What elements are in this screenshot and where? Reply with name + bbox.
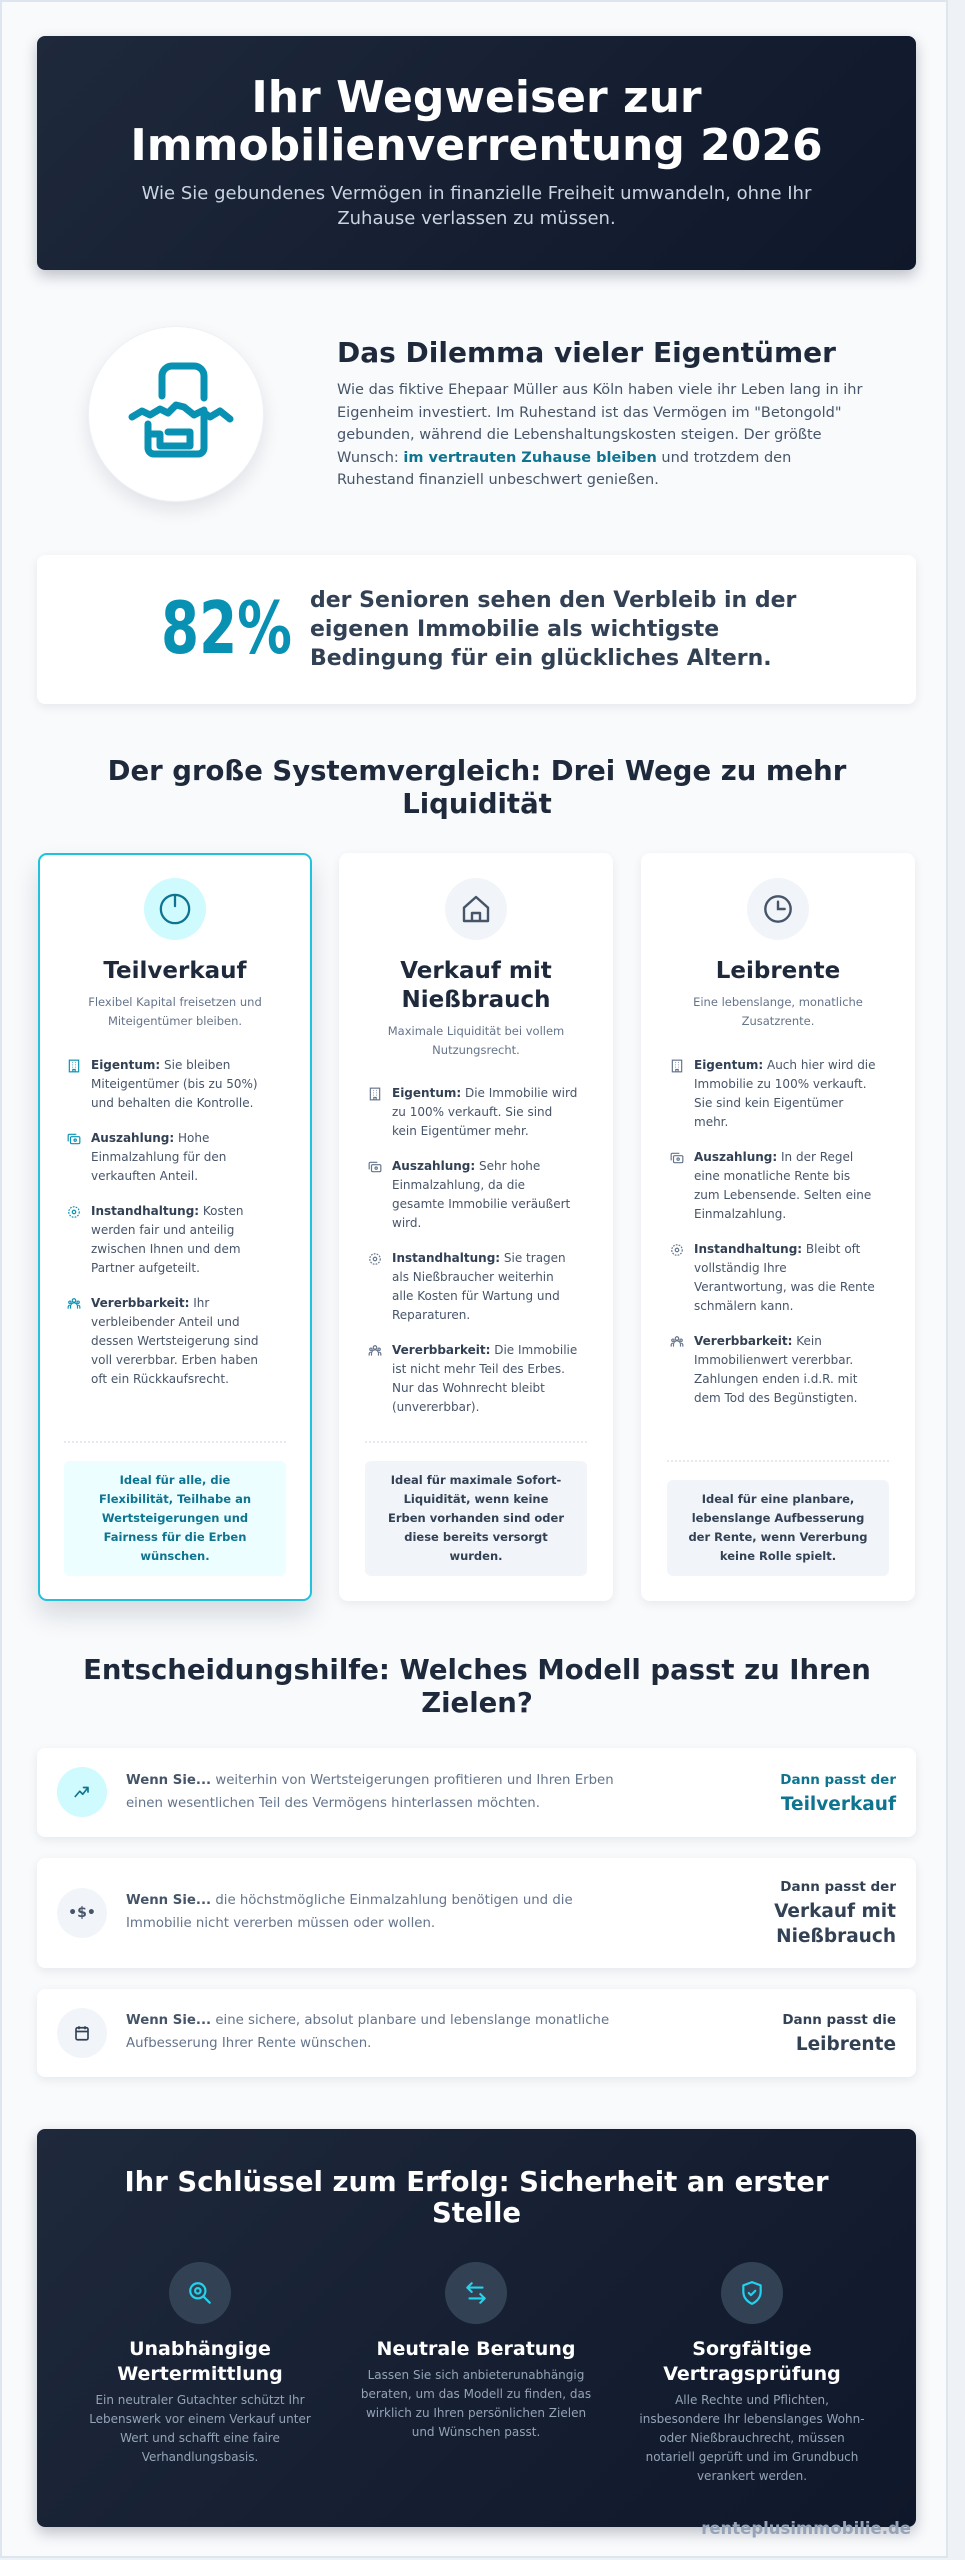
recommendation <box>774 1879 896 1947</box>
decision row: Nießbrauch <box>37 1858 916 1968</box>
recommendation box: der Rente, wenn Vererbung <box>688 1530 868 1544</box>
paragraph: Wie das fiktive Ehepaar Müller aus Köln haben viele ihr Leben lang in ihr <box>337 382 862 398</box>
big number: 82% <box>161 586 292 670</box>
item: valuation: Verhandlungsbasis. <box>142 2450 258 2464</box>
item: contract check: Alle Rechte und Pflichten, <box>675 2393 829 2407</box>
subtitle: Wie Sie gebundenes Vermögen in finanzielle Freiheit umwandeln, ohne Ihr <box>142 183 811 204</box>
icon: money: •$• <box>68 1905 96 1921</box>
item: contract check <box>639 2262 865 2483</box>
item: valuation: Wert und schafft eine faire <box>120 2431 280 2445</box>
panel: key to success <box>37 2129 916 2527</box>
title: Ihr Wegweiser zur <box>251 72 702 123</box>
recommendation box: Ideal für alle, die <box>120 1473 230 1487</box>
heading: system comparison: Der große Systemvergleich: Drei Wege zu mehr Liquidität <box>108 755 846 820</box>
item: advice: beraten, um das Modell zu finden, das <box>361 2387 591 2401</box>
card title: Nießbrauch <box>402 987 550 1013</box>
condition text: Wenn Sie... eine sichere, absolut planbare und lebenslange monatliche <box>126 2013 609 2028</box>
subtitle <box>142 183 812 229</box>
feature list: Einmalzahlung, da die <box>392 1178 525 1192</box>
feature list: oft ein Rückkaufsrecht. <box>91 1372 229 1386</box>
feature list: eine monatliche Rente bis <box>694 1169 850 1183</box>
recommendation box: Flexibilität, Teilhabe an <box>99 1492 251 1506</box>
card subtitle: Nutzungsrecht. <box>432 1043 520 1057</box>
recommendation: Verkauf mit <box>774 1901 896 1922</box>
recommendation box: wurden. <box>449 1549 503 1563</box>
recommendation box <box>365 1441 587 1576</box>
title <box>130 72 823 171</box>
feature list: Reparaturen. <box>392 1308 470 1322</box>
panel: Verkauf mit Nießbrauch <box>339 853 613 1601</box>
item: valuation: Ein neutraler Gutachter schützt Ihr <box>95 2393 305 2407</box>
item: valuation: Unabhängige <box>129 2338 271 2360</box>
recommendation <box>780 1772 896 1815</box>
feature list: zu 100% verkauft. Sie sind <box>392 1105 552 1119</box>
item: contract check: notariell geprüft und im Grundbuch <box>646 2450 858 2464</box>
feature list: voll vererbbar. Erben haben <box>91 1353 258 1367</box>
recommendation box: Fairness für die Erben <box>104 1530 246 1544</box>
recommendation <box>782 2012 896 2055</box>
condition text <box>126 2013 609 2050</box>
stat text: der Senioren sehen den Verbleib in der <box>310 588 796 613</box>
watermark: renteplusimmobilie.de <box>701 2519 911 2538</box>
icon: house <box>445 878 507 940</box>
heading: Ihr Schlüssel zum Erfolg: Sicherheit an erster Stelle <box>124 2166 829 2229</box>
feature list: zwischen Ihnen und dem <box>91 1242 241 1256</box>
feature list: dem Tod des Begünstigten. <box>694 1391 858 1405</box>
paragraph: gebunden, während die Lebenshaltungskosten steigen. Der größte <box>337 427 822 443</box>
recommendation box: keine Rolle spielt. <box>720 1549 836 1563</box>
title: Immobilienverrentung 2026 <box>130 120 823 171</box>
feature list: werden fair und anteilig <box>91 1223 234 1237</box>
icon: arrows <box>445 2262 507 2324</box>
recommendation box: lebenslange Aufbesserung <box>692 1511 864 1525</box>
feature list: Nur das Wohnrecht bleibt <box>392 1381 545 1395</box>
feature list: und behalten die Kontrolle. <box>91 1096 253 1110</box>
feature list: zum Lebensende. Selten eine <box>694 1188 871 1202</box>
feature list: Eigentum: Sie bleiben <box>91 1058 230 1072</box>
feature list <box>670 1058 876 1405</box>
card title: Verkauf mit <box>400 958 552 984</box>
recommendation: Teilverkauf <box>781 1794 896 1815</box>
recommendation box <box>64 1441 286 1576</box>
card title <box>400 958 552 1013</box>
icon: trend up <box>57 1767 107 1817</box>
item: contract check: verankert werden. <box>697 2469 807 2483</box>
feature list: verkauften Anteil. <box>91 1169 198 1183</box>
recommendation: Leibrente <box>796 2034 896 2055</box>
item: advice: und Wünschen passt. <box>412 2425 540 2439</box>
feature list <box>68 1058 259 1386</box>
item: valuation <box>89 2262 311 2464</box>
feature list: Partner aufgeteilt. <box>91 1261 200 1275</box>
header banner <box>37 36 916 270</box>
subtitle: Zuhause verlassen zu müssen. <box>337 208 616 229</box>
feature list: ist nicht mehr Teil des Erbes. <box>392 1362 565 1376</box>
recommendation: Dann passt die <box>782 2012 896 2028</box>
feature list: Auszahlung: Sehr hohe <box>392 1159 540 1173</box>
recommendation box <box>667 1460 889 1576</box>
card subtitle <box>388 1024 564 1057</box>
feature list: Auszahlung: In der Regel <box>694 1150 853 1164</box>
icon: shield <box>721 2262 783 2324</box>
feature list: Vererbbarkeit: Die Immobilie <box>392 1343 577 1357</box>
feature list: Instandhaltung: Kosten <box>91 1204 243 1218</box>
condition text <box>126 1893 573 1930</box>
feature list: schmälern kann. <box>694 1299 793 1313</box>
card subtitle: Eine lebenslange, monatliche <box>693 995 863 1009</box>
feature list: Instandhaltung: Sie tragen <box>392 1251 566 1265</box>
stat text: Bedingung für ein glückliches Altern. <box>310 646 772 671</box>
card subtitle <box>693 995 863 1028</box>
recommendation box: diese bereits versorgt <box>404 1530 548 1544</box>
feature list: kein Eigentümer mehr. <box>392 1124 529 1138</box>
feature list: alle Kosten für Wartung und <box>392 1289 560 1303</box>
feature list: als Nießbraucher weiterhin <box>392 1270 554 1284</box>
feature list: mehr. <box>694 1115 728 1129</box>
paragraph <box>337 382 862 488</box>
feature list: verbleibender Anteil und <box>91 1315 240 1329</box>
feature list: Vererbbarkeit: Ihr <box>91 1296 209 1310</box>
icon: calendar <box>57 2008 107 2058</box>
item: contract check: insbesondere Ihr lebenslanges Wohn- <box>639 2412 865 2426</box>
paragraph: Ruhestand finanziell unbeschwert genießen. <box>337 472 659 488</box>
item: contract check: oder Nießbrauchrecht, müssen <box>659 2431 845 2445</box>
card subtitle: Miteigentümer bleiben. <box>108 1014 242 1028</box>
recommendation: Nießbrauch <box>776 1926 896 1947</box>
icon: house lock in circle <box>88 326 264 502</box>
feature list: (unvererbbar). <box>392 1400 479 1414</box>
condition text: Immobilie nicht vererben müssen oder wollen. <box>126 1916 435 1930</box>
feature list: Vererbbarkeit: Kein <box>694 1334 822 1348</box>
decision row: Leibrente <box>37 1989 916 2077</box>
item: advice <box>361 2262 591 2439</box>
feature list: Sie sind kein Eigentümer <box>694 1096 843 1110</box>
feature list: gesamte Immobilie veräußert <box>392 1197 570 1211</box>
card subtitle: Maximale Liquidität bei vollem <box>388 1024 564 1038</box>
item: valuation: Lebenswerk vor einem Verkauf unter <box>89 2412 311 2426</box>
feature list <box>368 1086 577 1414</box>
stat text <box>310 588 796 671</box>
feature list: Auszahlung: Hohe <box>91 1131 209 1145</box>
recommendation box: wünschen. <box>140 1549 210 1563</box>
decision row: Teilverkauf <box>37 1748 916 1837</box>
condition text: Aufbesserung Ihrer Rente wünschen. <box>126 2036 371 2050</box>
stat text: eigenen Immobilie als wichtigste <box>310 617 719 642</box>
icon: clock <box>747 878 809 940</box>
condition text: Wenn Sie... weiterhin von Wertsteigerungen profitieren und Ihren Erben <box>126 1773 614 1788</box>
icon: search <box>169 2262 231 2324</box>
card title: Teilverkauf <box>103 958 247 984</box>
condition text: Wenn Sie... die höchstmögliche Einmalzahlung benötigen und die <box>126 1893 573 1908</box>
item: advice: wirklich zu Ihren persönlichen Zielen <box>366 2406 586 2420</box>
item: valuation: Wertermittlung <box>117 2363 283 2385</box>
feature list: dessen Wertsteigerung sind <box>91 1334 259 1348</box>
feature list: vollständig Ihre <box>694 1261 787 1275</box>
feature list: Zahlungen enden i.d.R. mit <box>694 1372 857 1386</box>
recommendation: Dann passt der <box>780 1879 896 1895</box>
card subtitle: Flexibel Kapital freisetzen und <box>88 995 262 1009</box>
feature list: Immobilie zu 100% verkauft. <box>694 1077 867 1091</box>
item: contract check: Vertragsprüfung <box>663 2363 841 2385</box>
card title: Leibrente <box>716 958 840 984</box>
card subtitle: Zusatzrente. <box>742 1014 814 1028</box>
recommendation box: Liquidität, wenn keine <box>404 1492 548 1506</box>
feature list: Immobilienwert vererbbar. <box>694 1353 853 1367</box>
icon: money <box>57 1888 107 1938</box>
icon: power <box>144 878 206 940</box>
stat card: 82% <box>37 555 916 704</box>
feature list: Instandhaltung: Bleibt oft <box>694 1242 860 1256</box>
panel: Leibrente <box>641 853 915 1601</box>
condition text <box>126 1773 614 1810</box>
heading: Das Dilemma vieler Eigentümer <box>337 336 836 369</box>
recommendation box: Ideal für eine planbare, <box>702 1492 854 1506</box>
feature list: Eigentum: Die Immobilie wird <box>392 1086 577 1100</box>
item: advice: Neutrale Beratung <box>377 2338 575 2360</box>
paragraph: Eigenheim investiert. Im Ruhestand ist das Vermögen im "Betongold" <box>337 404 842 420</box>
feature list: wird. <box>392 1216 421 1230</box>
text block: dilemma <box>337 336 862 488</box>
item: advice: Lassen Sie sich anbieterunabhängig <box>368 2368 584 2382</box>
feature list: Miteigentümer (bis zu 50%) <box>91 1077 258 1091</box>
feature list: Eigentum: Auch hier wird die <box>694 1058 876 1072</box>
feature list: Einmalzahlung. <box>694 1207 786 1221</box>
card subtitle <box>88 995 262 1028</box>
feature list: Verantwortung, was die Rente <box>694 1280 875 1294</box>
recommendation: Dann passt der <box>780 1772 896 1788</box>
feature list: Einmalzahlung für den <box>91 1150 226 1164</box>
recommendation box: Wertsteigerungen und <box>102 1511 248 1525</box>
recommendation box: Erben vorhanden sind oder <box>388 1511 564 1525</box>
heading: decision aid: Entscheidungshilfe: Welches Modell passt zu Ihren Zielen? <box>83 1654 871 1719</box>
paragraph: Wunsch: im vertrauten Zuhause bleiben und trotzdem den <box>337 450 791 466</box>
condition text: einen wesentlichen Teil des Vermögens hinterlassen möchten. <box>126 1796 540 1810</box>
panel: Teilverkauf <box>38 853 312 1601</box>
item: contract check: Sorgfältige <box>692 2338 812 2360</box>
recommendation box: Ideal für maximale Sofort- <box>391 1473 561 1487</box>
